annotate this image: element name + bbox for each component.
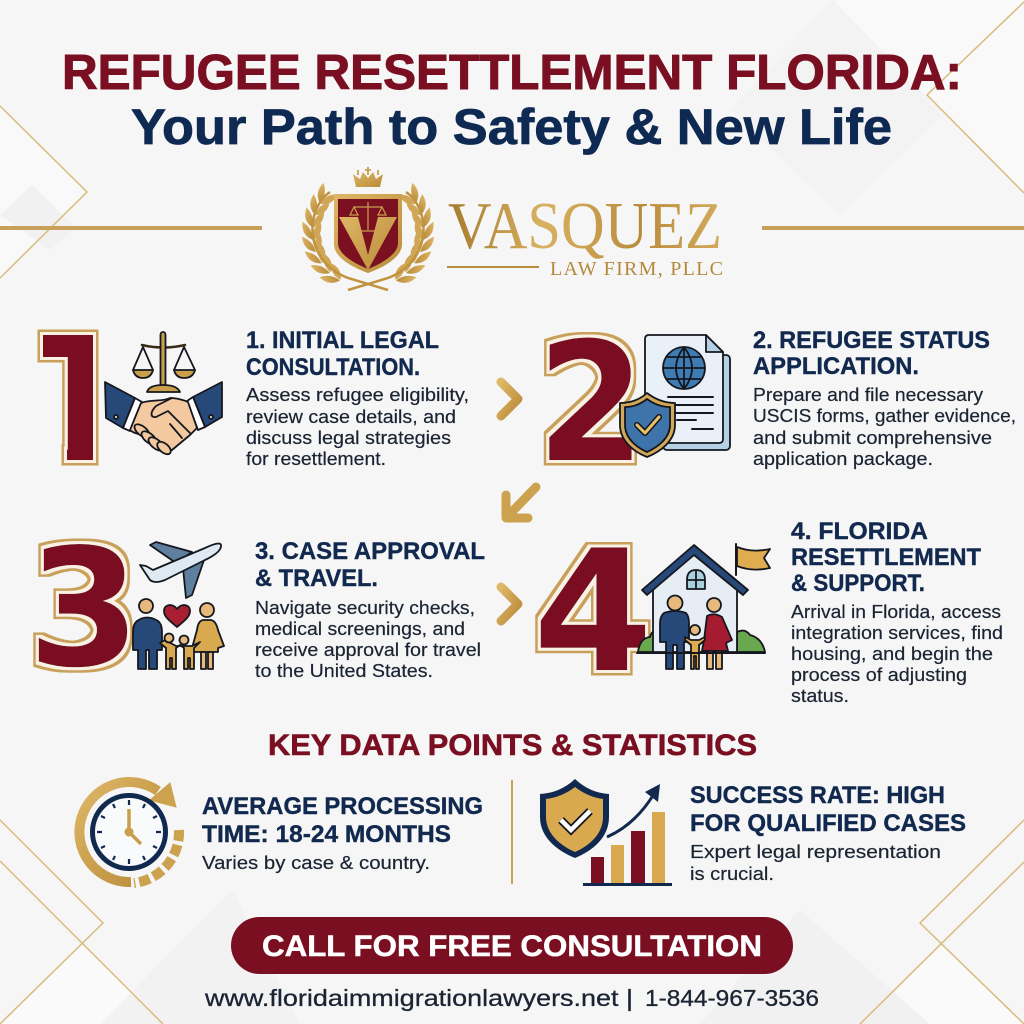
step 4 text: status. [791,686,849,706]
call to action button [231,917,793,974]
step 2 [537,307,1016,499]
step 4 text: housing, and begin the [791,644,993,664]
logo: firm name: LAW FIRM, PLLC [550,258,723,280]
stat heading: FOR QUALIFIED CASES [690,810,966,837]
title: Your Path to Safety & New Life [131,99,892,155]
icon: plane and family [133,542,224,669]
arrow: step 2 to 3 [506,487,536,518]
stat: processing time [79,782,483,883]
arrow: step 3 to 4 [501,587,518,621]
step 1 heading [246,327,439,381]
stat heading [690,782,966,837]
stat note: Expert legal representation [690,842,941,862]
numeral 2: 2 [537,307,645,499]
stat heading [202,793,483,848]
step 2 text: application package. [753,449,933,469]
father [133,618,162,669]
step 1 text [246,385,469,469]
logo: firm name: VASQUEZ [448,189,722,263]
step 4 heading [791,518,981,597]
plane [140,542,221,598]
crown [353,167,383,187]
step 4 text [791,602,1003,706]
stat note: is crucial. [690,864,774,884]
step 3 heading [255,538,485,592]
arrow: step 1 to 2 [501,382,518,416]
footer contact: 1-844-967-3536 [645,985,819,1011]
laurel wreath [301,183,435,290]
step 3 heading: & TRAVEL. [255,565,378,592]
stat note [690,842,941,884]
step 1 heading: 1. INITIAL LEGAL [246,327,439,354]
step 2 text: and submit comprehensive [753,428,992,448]
footer contact [204,985,819,1011]
step 3 text: medical screenings, and [255,619,465,639]
icon: shield and growth chart [540,779,672,886]
stat: success rate [540,779,966,886]
divider [511,780,513,884]
step 4 text: process of adjusting [791,665,967,685]
logo: crest [301,167,435,290]
step 4 heading: RESETTLEMENT [791,544,981,571]
numeral 3: 3 [28,515,140,704]
bushes [638,631,765,652]
step 3 heading: 3. CASE APPROVAL [255,538,485,565]
step 2 text: USCIS forms, gather evidence, [753,406,1016,426]
mother [192,620,224,652]
footer contact: www.floridaimmigrationlawyers.net | [204,985,633,1011]
shield [334,194,402,273]
step 2 heading: 2. REFUGEE STATUS [753,327,990,354]
child [685,637,705,669]
step 4 heading: & SUPPORT. [791,570,925,597]
house [653,552,737,652]
step 3 text: Navigate security checks, [255,598,475,618]
step 3 [28,515,485,704]
step 1 text: review case details, and [246,407,456,427]
icon: scales and handshake [105,332,222,457]
title: REFUGEE RESETTLEMENT FLORIDA: [62,46,962,100]
icon: house and family [637,544,770,669]
stat heading: AVERAGE PROCESSING [202,793,483,820]
icon: clock [79,782,179,883]
step 1 text: discuss legal strategies [246,428,451,448]
step 3 text [255,598,481,681]
stat note: Varies by case & country. [202,853,430,873]
step 1 text: Assess refugee eligibility, [246,385,469,405]
icon: document and shield [620,335,730,457]
heading: key data: KEY DATA POINTS & STATISTICS [268,729,757,762]
step 1 text: for resettlement. [246,449,386,469]
mother [702,614,732,651]
title [62,46,962,155]
logo divider lines [0,226,1024,230]
call to action button: CALL FOR FREE CONSULTATION [262,930,762,963]
step 1 heading: CONSULTATION. [246,354,420,381]
stat heading: TIME: 18-24 MONTHS [202,821,451,848]
stat heading: SUCCESS RATE: HIGH [690,782,945,809]
numeral 1 [38,330,98,466]
step 4 text: integration services, find [791,623,1003,643]
step 3 text: to the United States. [255,661,433,681]
step 4 [533,514,1003,710]
step 2 heading [753,327,990,380]
step 4 text: Arrival in Florida, access [791,602,1001,622]
step 1 [38,330,468,466]
step 2 text: Prepare and file necessary [753,385,983,405]
step 4 heading: 4. FLORIDA [791,518,928,545]
step 2 heading: APPLICATION. [753,353,919,380]
father [660,611,689,669]
step 3 text: receive approval for travel [255,640,481,660]
numeral 4: 4 [533,514,653,710]
numeral 1: 1 [21,290,132,513]
heart [164,605,190,627]
step 2 text [753,385,1016,469]
children [160,640,200,669]
